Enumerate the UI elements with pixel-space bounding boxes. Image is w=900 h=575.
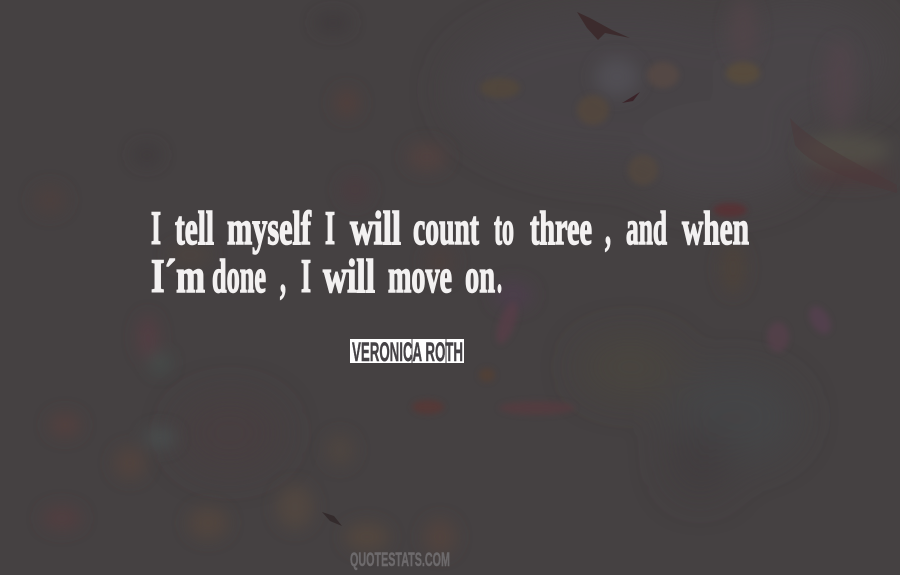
quote line 2: will: [323, 250, 375, 303]
quote line 2: done: [212, 250, 266, 303]
quote line 1: when: [682, 202, 749, 255]
quote line 2: I: [301, 250, 311, 303]
quote line 1: will: [350, 202, 401, 255]
quote line 2: I´m: [151, 250, 205, 303]
source watermark: QUOTESTATS.COM: [350, 550, 450, 571]
quote line 2: on: [465, 250, 495, 303]
quote line 1: and: [626, 202, 667, 255]
quote line 1: myself: [227, 202, 312, 255]
quote line 1: ,: [605, 202, 611, 255]
quote text: .: [497, 250, 502, 303]
quote line 2: move: [388, 250, 452, 303]
quote line 1: count: [413, 202, 479, 255]
quote card: VERONICA ROTH: [352, 337, 463, 367]
quote line 1: I: [325, 202, 335, 255]
quote line 1: three: [530, 202, 592, 255]
quote line 1: I: [151, 202, 161, 255]
quote line 2: ,: [280, 250, 286, 303]
quote text: [151, 202, 749, 303]
author label: [350, 337, 464, 367]
quote line 1: to: [494, 202, 514, 255]
quote line 1: [151, 202, 749, 255]
quote line 1: tell: [175, 202, 214, 255]
quote line 2: [151, 250, 502, 303]
